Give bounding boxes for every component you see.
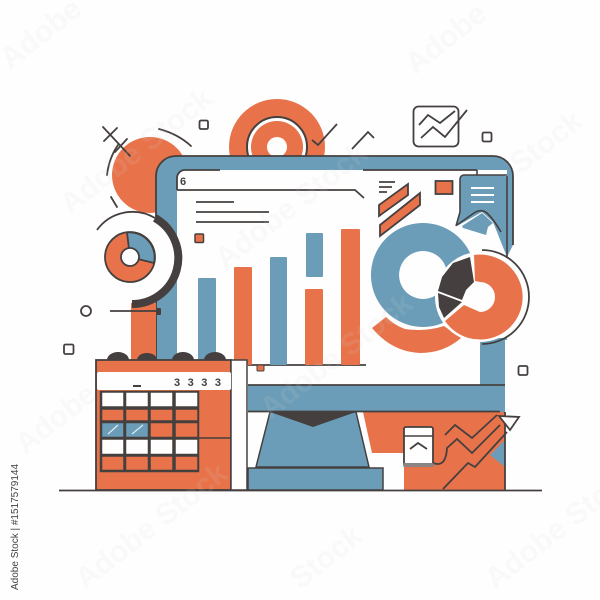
monitor stand (248, 412, 383, 490)
watermarks: Stock (284, 519, 369, 596)
calendar grid (100, 392, 198, 472)
watermarks: Adobe Stock (54, 81, 219, 221)
icon: small squares (64, 120, 528, 375)
calendar date text: 3333 (174, 377, 228, 389)
big orange circle (112, 137, 188, 213)
monitor screen (177, 170, 507, 385)
small screen marker (257, 365, 264, 371)
blue side tab (456, 170, 507, 258)
watermarks: Adobe Stock (254, 286, 419, 426)
orange legend rectangle (436, 181, 452, 194)
bar chart (198, 229, 360, 365)
top orange target (229, 99, 325, 195)
blue corner and frame edge (248, 412, 505, 490)
screen icon glyph: 6 (180, 176, 186, 188)
ground line (59, 490, 542, 492)
note card (403, 427, 434, 467)
watermarks: Adobe Stock (209, 136, 374, 276)
calendar (96, 352, 247, 490)
icon: cross sparkle and arcs (103, 127, 191, 207)
calendar body (96, 360, 231, 490)
magnifying glass (85, 212, 178, 361)
orange donut with dark wedges (435, 250, 529, 344)
icon: check mark and chevron (312, 124, 374, 149)
calendar header band (97, 372, 231, 390)
watermarks: Adobe (9, 377, 103, 461)
calendar rings (107, 352, 226, 360)
diagonal stripes (379, 182, 420, 236)
orange arc (372, 317, 461, 353)
watermarks: Stock (504, 104, 589, 181)
monitor frame (156, 156, 513, 412)
calendar binding strip (231, 360, 247, 490)
orange desk block (363, 412, 505, 490)
handle line and small circle (81, 306, 161, 316)
pencil trend lines (433, 415, 519, 489)
stock id caption: Adobe Stock | #1517579144 (10, 464, 21, 590)
icon: trend chart box (414, 106, 467, 146)
small orange square (195, 234, 204, 242)
screen outline and text lines (177, 170, 505, 385)
calendar dash (133, 385, 141, 387)
blue donut (371, 223, 475, 327)
watermarks: Adobe Stock (69, 456, 234, 596)
